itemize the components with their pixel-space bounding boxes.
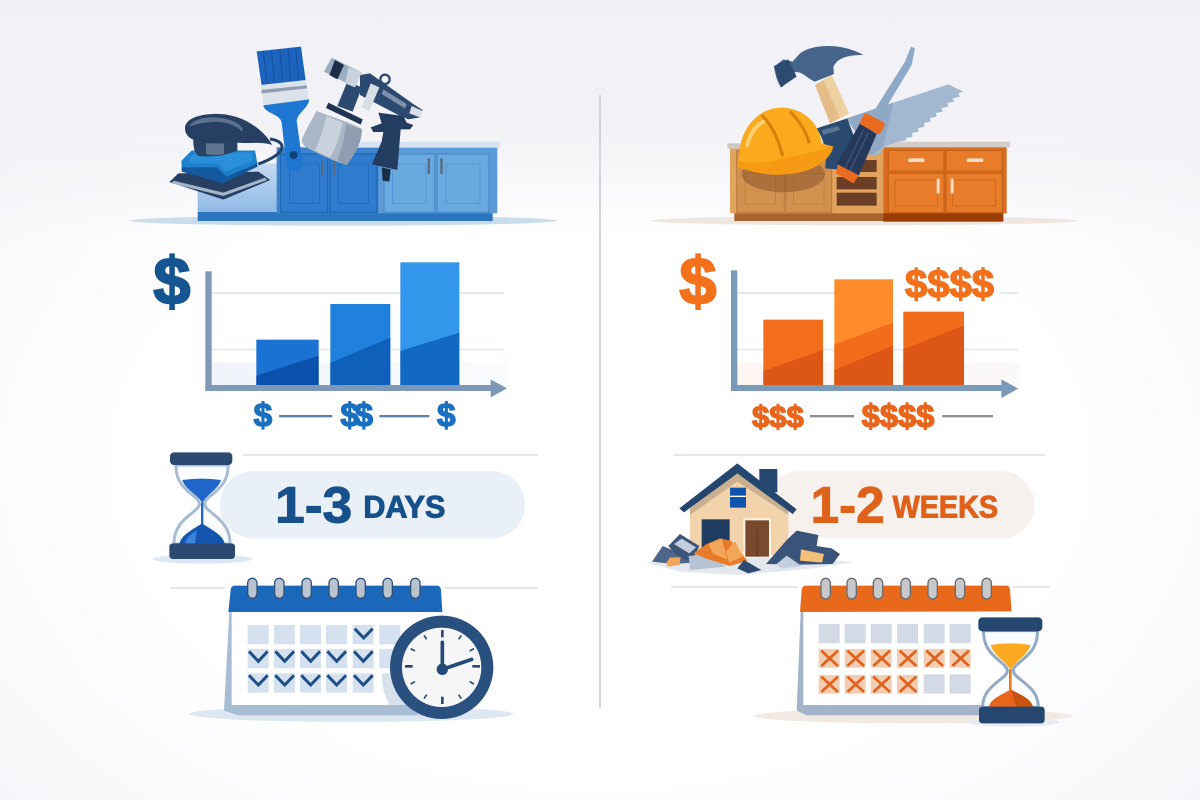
pill: duration label xyxy=(220,471,525,538)
icon: spray gun xyxy=(302,58,423,182)
axis labels: dollar scale xyxy=(752,397,993,434)
calendar day cells xyxy=(819,624,971,694)
axis labels: dollar scale xyxy=(254,397,456,434)
axis labels: dollar scale: $ xyxy=(254,397,273,434)
pill: duration label: 1-2 xyxy=(811,477,885,534)
calendar day cells xyxy=(248,625,400,693)
duration: 1-2 weeks xyxy=(646,463,1034,575)
axis labels: dollar scale: $$$$ xyxy=(862,397,934,434)
icon: hammer xyxy=(774,46,863,123)
illustration: refinishing tools on blue cabinets xyxy=(130,47,557,226)
icon: calendar with hourglass xyxy=(753,578,1073,727)
clock face xyxy=(390,616,493,719)
center divider xyxy=(599,95,601,708)
icon: hand saw xyxy=(817,84,963,169)
calendar cross marks xyxy=(821,651,969,692)
bar: low cost xyxy=(256,340,319,385)
icon: orange hourglass xyxy=(967,617,1060,727)
calendar check marks xyxy=(249,629,373,685)
pill: duration label: WEEKS xyxy=(893,490,998,525)
icon: orbital sander xyxy=(169,114,282,200)
bar: third cost xyxy=(903,312,964,385)
axis labels: dollar scale: $$ xyxy=(340,397,373,434)
bar: high cost xyxy=(400,262,459,385)
icon: paint brush xyxy=(257,47,309,171)
icon: house with rubble xyxy=(646,463,853,575)
bar: second cost xyxy=(834,279,893,385)
axis labels: dollar scale: $$$ xyxy=(752,399,804,434)
pill: duration label: DAYS xyxy=(363,490,445,525)
bar: medium cost xyxy=(330,304,390,385)
icon: large dollar sign: $ xyxy=(153,245,190,319)
calendar rings xyxy=(248,578,420,598)
axis labels: dollar scale: $ xyxy=(437,397,456,434)
icon: hard hat xyxy=(738,108,833,175)
rubble pile xyxy=(652,531,840,573)
duration: 1-3 days xyxy=(153,452,525,564)
chart axes xyxy=(205,271,507,397)
label: four dollars above bars: $$$$ xyxy=(905,262,994,306)
icon: calendar with clock xyxy=(190,578,513,722)
bar: first cost xyxy=(763,320,823,385)
pill: duration label: 1-3 xyxy=(275,477,352,534)
panel: refinishing (left) xyxy=(130,47,557,722)
icon: blue hourglass xyxy=(153,452,253,564)
icon: large dollar sign: $ xyxy=(679,245,716,319)
panel: replacement (right) xyxy=(646,46,1077,727)
icon: screwdriver xyxy=(836,47,915,183)
calendar rings xyxy=(821,578,991,599)
illustration: construction tools on wood cabinets xyxy=(650,46,1077,225)
chart axes xyxy=(731,270,1018,398)
chart: cost bars for replacement xyxy=(679,245,1020,434)
pill: duration label xyxy=(767,471,1034,538)
chart: cost bars for refinishing xyxy=(153,245,508,434)
